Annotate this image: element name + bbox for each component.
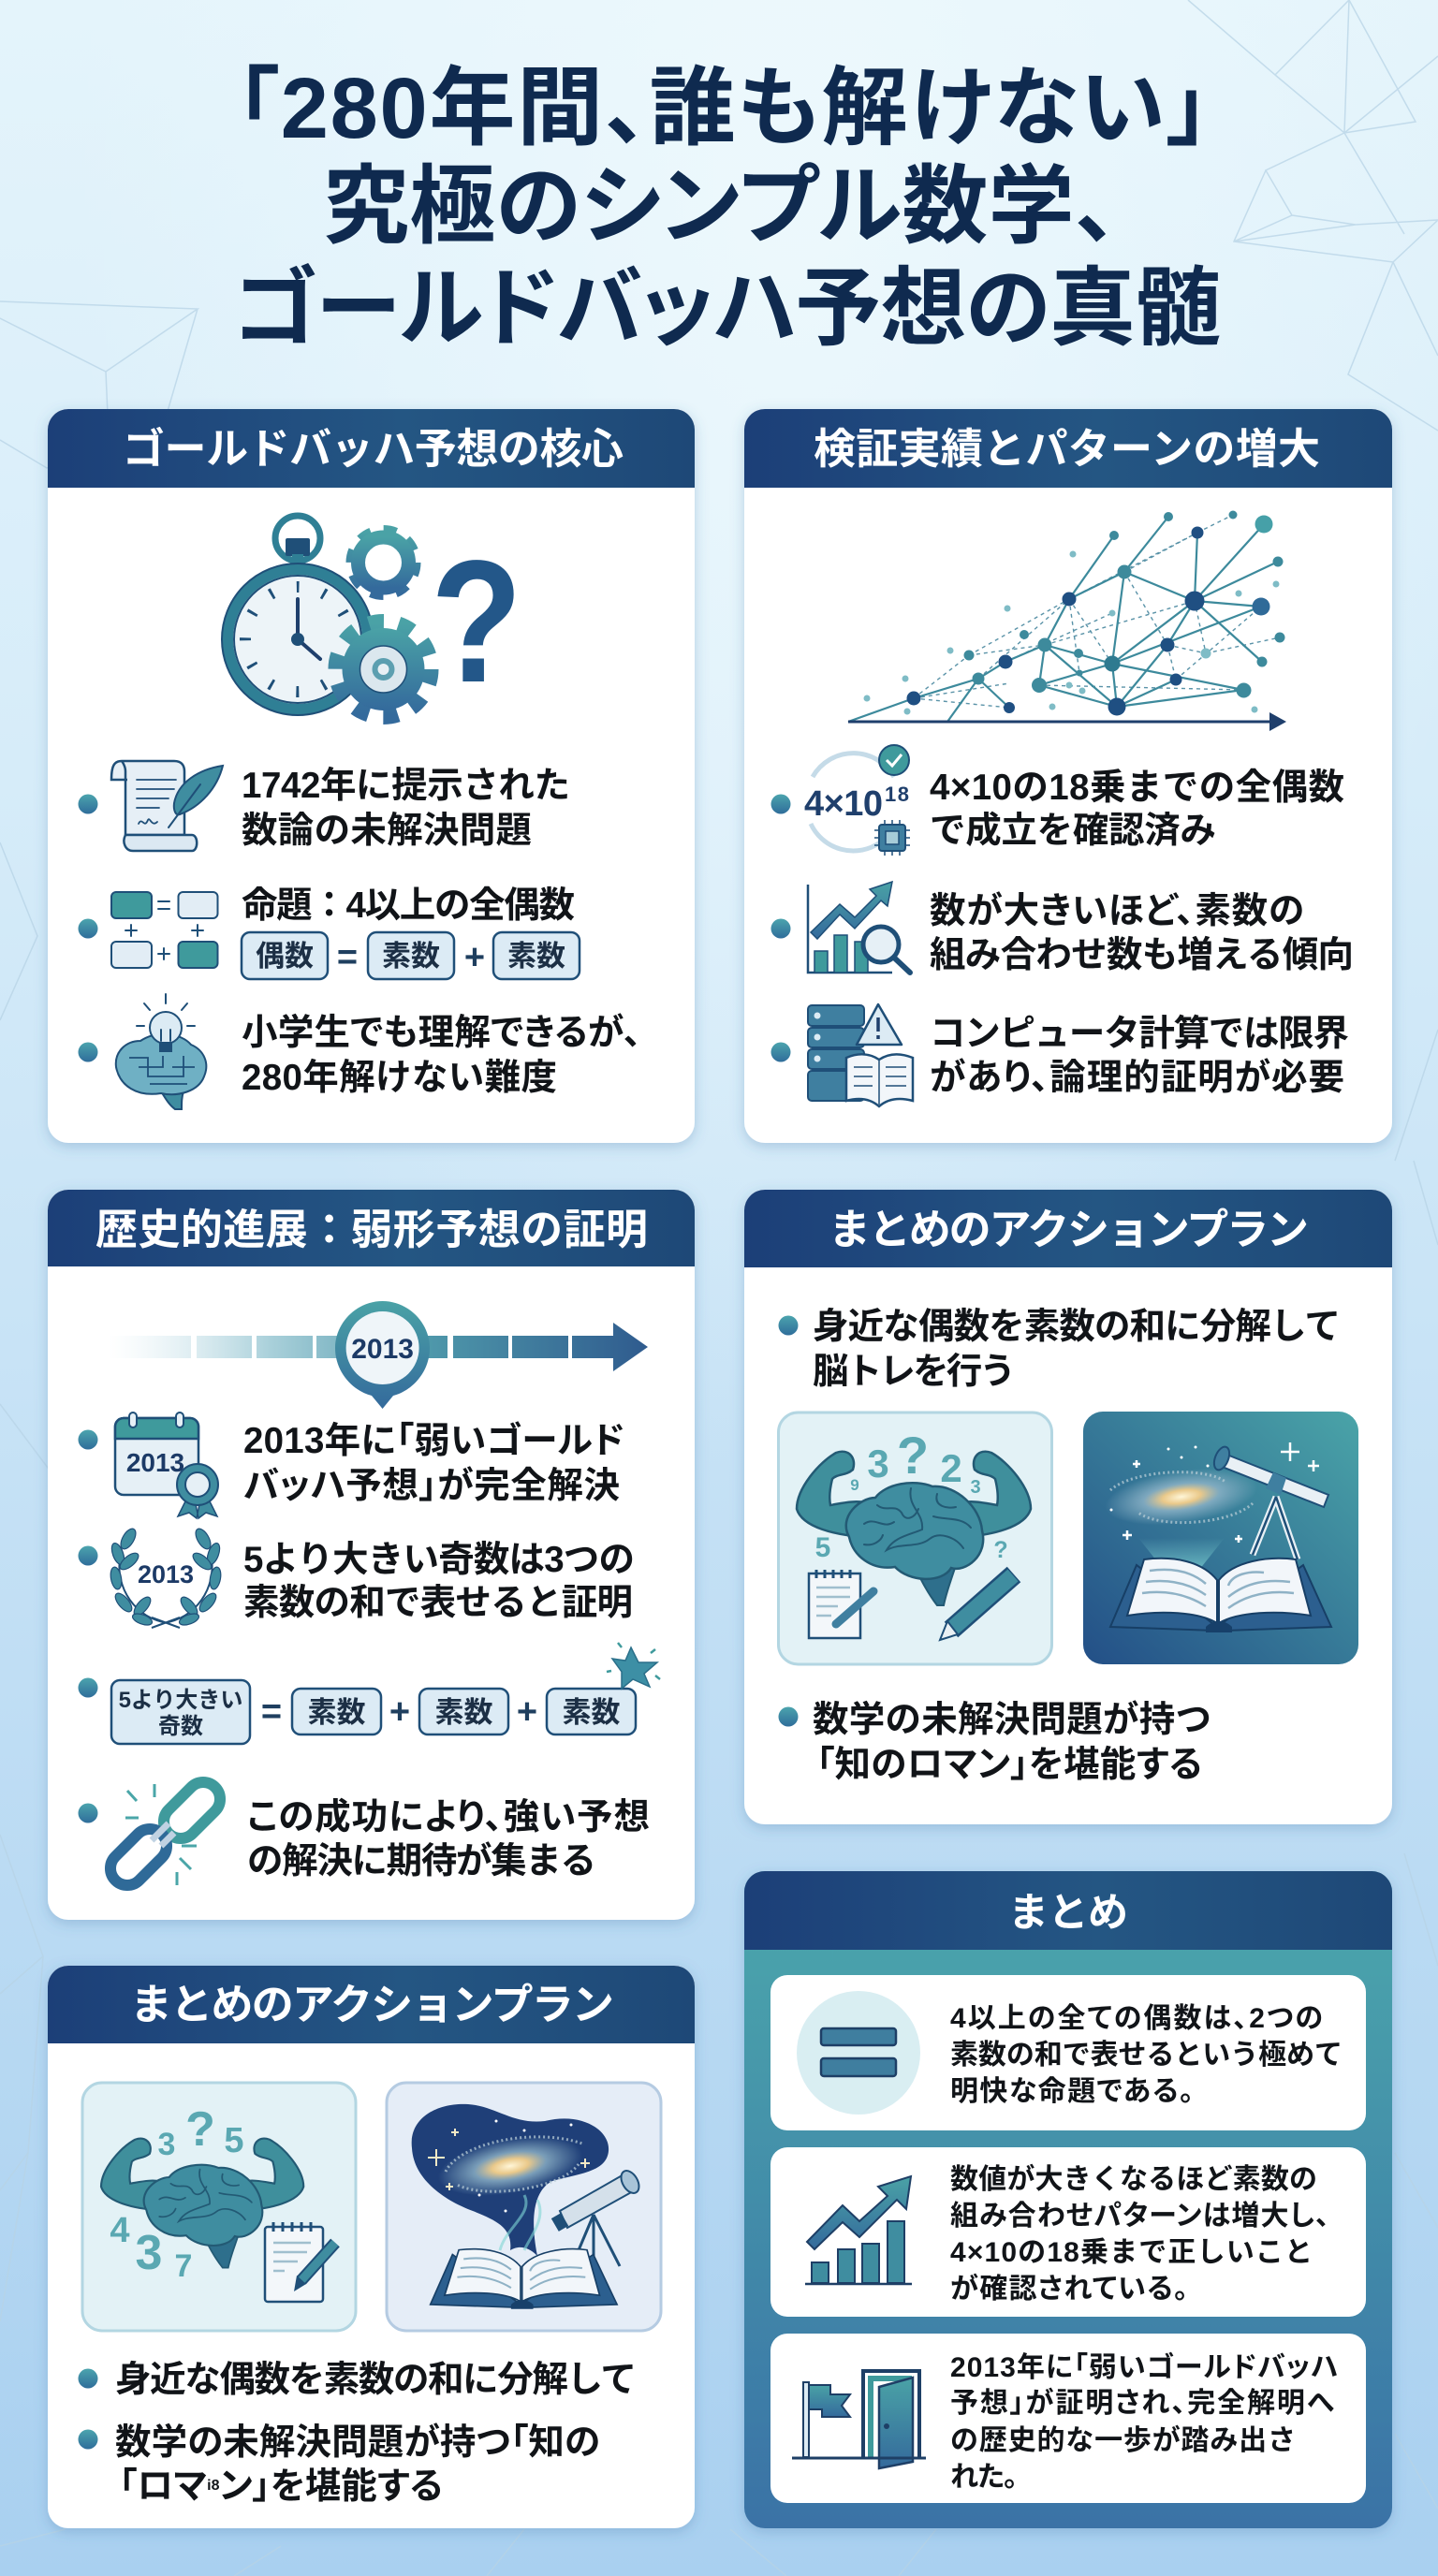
summary card: growth of patterns <box>770 2147 1366 2317</box>
bullet item: proposition: 命題：4以上の全偶数 <box>242 886 575 926</box>
bullet item: decompose even numbers: 身近な偶数を素数の和に分解して <box>115 2360 637 2400</box>
bullet item: computation limit: があり、論理的証明が必要 <box>930 1058 1344 1098</box>
summary card: growth of patterns: 数値が大きくなるほど素数の <box>950 2163 1317 2195</box>
panel heading: まとめのアクションプラン <box>130 1981 614 2028</box>
bullet item: three-prime equation <box>79 1643 660 1744</box>
bullet item: history: 数論の未解決問題 <box>242 811 532 851</box>
bullet item: growth tendency: 組み合わせ数も増える傾向 <box>930 935 1354 975</box>
bullet item: verified range: で成立を確認済み <box>930 811 1216 851</box>
card: muscular brain illustration: 3 <box>136 2226 162 2280</box>
card: muscular brain illustration: 4 <box>110 2211 130 2250</box>
summary card: growth of patterns: が確認されている。 <box>950 2273 1188 2305</box>
bullet item: three-prime equation: 5より大きい <box>119 1688 242 1713</box>
summary card: growth of patterns: 組み合わせパターンは増大し、 <box>950 2201 1329 2232</box>
bullet item: verified range <box>771 745 1344 856</box>
title: 究極のシンプル数学、 <box>323 159 1118 255</box>
bullet item: computation limit <box>771 1004 1349 1106</box>
icon: equals sign <box>797 1991 920 2115</box>
card: muscular brain illustration: 3 <box>158 2127 175 2162</box>
icon: stopwatch, gears and question mark: ? <box>431 524 522 719</box>
icon: box equation <box>111 892 217 968</box>
equation: even = prime + prime: 素数 <box>382 940 440 973</box>
card: muscular brain illustration <box>779 1412 1052 1664</box>
bullet item: three-prime equation: = <box>261 1692 282 1732</box>
summary card: the proposition: 素数の和で表せるという極めて <box>950 2040 1343 2071</box>
bullet item: growth tendency: 数が大きいほど、素数の <box>930 891 1304 931</box>
bullet item: three-prime equation: 奇数 <box>158 1714 203 1739</box>
icon: laurel wreath 2013: 2013 <box>138 1560 194 1588</box>
bullet item: difficulty: 小学生でも理解できるが、 <box>242 1013 641 1053</box>
bullet item: weak conjecture statement: 5より大きい奇数は3つの <box>243 1540 635 1580</box>
bullet item: weak conjecture statement <box>79 1527 635 1628</box>
bullet item: proposition <box>79 886 580 979</box>
icon: broken chain <box>104 1776 227 1892</box>
bullet item: romance of knowledge: 「ロマ <box>119 2466 207 2507</box>
panel heading <box>48 409 695 488</box>
panel heading <box>48 1966 695 2043</box>
card: muscular brain illustration: ? <box>993 1537 1008 1563</box>
panel heading: 歴史的進展：弱形予想の証明 <box>95 1206 648 1253</box>
bullet item: romance of mathematics: 数学の未解決問題が持つ <box>813 1700 1211 1740</box>
panel: verification record and growth of patterns <box>744 409 1392 1143</box>
card: muscular brain illustration: 9 <box>850 1476 859 1494</box>
icon: server, warning and book <box>808 1004 913 1106</box>
bullet item: three-prime equation: 素数 <box>307 1696 365 1729</box>
card: galaxy, telescope and book illustration <box>1083 1412 1358 1664</box>
panel heading: 検証実績とパターンの増大 <box>814 425 1320 473</box>
icon: rising chart with magnifier <box>808 882 910 973</box>
bullet item: history <box>79 761 570 851</box>
card: muscular brain illustration: 5 <box>224 2121 244 2160</box>
icon: calendar with rosette: 2013 <box>126 1448 184 1477</box>
bullet item: three-prime equation: + <box>517 1692 537 1732</box>
card: galaxy, telescope and book illustration <box>387 2083 661 2331</box>
panel: historical progress <box>48 1190 695 1920</box>
icon: rising bar chart <box>805 2176 912 2284</box>
panel: core of the conjecture <box>48 409 695 1143</box>
summary card: historic step: の歴史的な一歩が踏み出さ <box>950 2424 1296 2456</box>
equation: even = prime + prime <box>242 932 580 979</box>
panel heading: まとめのアクションプラン <box>829 1206 1309 1253</box>
card: muscular brain illustration: 3 <box>970 1477 981 1498</box>
card: muscular brain illustration: ? <box>897 1426 929 1485</box>
bullet item: romance of knowledge: i8 <box>207 2478 220 2494</box>
bullet item: solved in 2013: 2013年に「弱いゴールド <box>243 1421 624 1461</box>
icon: star <box>607 1643 660 1689</box>
card: muscular brain illustration <box>82 2083 356 2331</box>
summary card: historic step: 2013年に「弱いゴールドバッハ <box>950 2351 1338 2383</box>
icon: 4×10^18 with check and chip: 18 <box>885 783 909 806</box>
summary card: historic step: 予想」が証明され、完全解明へ <box>950 2387 1334 2419</box>
title <box>232 61 1221 357</box>
panel: action plan (right) <box>744 1190 1392 1824</box>
panel heading <box>744 1871 1392 1950</box>
summary card: the proposition: 明快な命題である。 <box>950 2076 1194 2107</box>
bullet item: expectations for strong conjecture: この成功により、強い予想 <box>247 1797 650 1837</box>
bullet item: three-prime equation: + <box>389 1692 410 1732</box>
bullet item: romance of knowledge: 数学の未解決問題が持つ「知の <box>115 2422 600 2463</box>
bullet item: solved in 2013: バッハ予想」が完全解決 <box>243 1466 620 1506</box>
equation: even = prime + prime: 素数 <box>507 940 565 973</box>
bullet item: solved in 2013 <box>79 1412 624 1518</box>
summary card: the proposition <box>770 1975 1366 2130</box>
title: 「280年間、誰も解けない」 <box>236 61 1210 156</box>
panel heading <box>744 409 1392 488</box>
bullet item: brain training: 脳トレを行う <box>813 1352 1016 1392</box>
summary card: growth of patterns: 4×10の18乗まで正しいこと <box>950 2237 1313 2268</box>
icon: stopwatch, gears and question mark <box>222 516 522 719</box>
chart: prime network growing along an axis <box>848 511 1286 731</box>
card: muscular brain illustration: 3 <box>867 1442 889 1486</box>
bullet item: romance of mathematics: 「知のロマン」を堪能する <box>816 1745 1202 1785</box>
icon: scroll and quill <box>111 761 223 851</box>
timeline arrow with 2013 pin <box>109 1301 648 1409</box>
equation: even = prime + prime: = <box>337 938 358 977</box>
card: muscular brain illustration: 2 <box>940 1446 962 1490</box>
bullet item: three-prime equation: 素数 <box>562 1696 620 1729</box>
bullet item: romance of mathematics <box>779 1700 1211 1785</box>
bullet item: brain training <box>779 1307 1341 1392</box>
icon: brain with light bulb <box>116 994 206 1109</box>
bullet item: history: 1742年に提示された <box>242 766 570 806</box>
bullet item: expectations for strong conjecture: の解決に期待が集まる <box>247 1841 596 1881</box>
timeline arrow with 2013 pin: 2013 <box>351 1334 414 1365</box>
icon: calendar with rosette <box>115 1412 218 1518</box>
equation: even = prime + prime: + <box>464 938 485 977</box>
bullet item: romance of knowledge <box>79 2422 600 2507</box>
icon: 4×10^18 with check and chip <box>804 745 910 856</box>
bullet item: three-prime equation: 素数 <box>434 1696 492 1729</box>
bullet item: brain training: 身近な偶数を素数の和に分解して <box>813 1307 1341 1347</box>
bullet item: difficulty: 280年解けない難度 <box>242 1058 557 1098</box>
panel heading <box>744 1190 1392 1267</box>
panel heading <box>48 1190 695 1266</box>
bullet item: difficulty <box>79 994 641 1109</box>
icon: laurel wreath 2013 <box>109 1527 223 1628</box>
panel: action plan (left) <box>48 1966 695 2528</box>
panel heading: ゴールドバッハ予想の核心 <box>123 425 624 473</box>
summary card: historic step <box>770 2334 1366 2503</box>
icon: flag and open door <box>792 2371 926 2468</box>
panel heading: まとめ <box>1008 1891 1128 1936</box>
summary card: historic step: れた。 <box>950 2462 1018 2493</box>
title: ゴールドバッハ予想の真髄 <box>232 261 1221 357</box>
card: muscular brain illustration: ? <box>185 2102 215 2157</box>
bullet item: verified range: 4×10の18乗までの全偶数 <box>930 768 1344 808</box>
bullet item: weak conjecture statement: 素数の和で表せると証明 <box>243 1583 633 1623</box>
bullet item: growth tendency <box>771 882 1354 975</box>
bullet item: expectations for strong conjecture <box>79 1776 650 1892</box>
bullet item: computation limit: コンピュータ計算では限界 <box>930 1014 1349 1054</box>
panel: summary <box>744 1871 1392 2528</box>
equation: even = prime + prime: 偶数 <box>256 940 314 973</box>
summary card: the proposition: 4以上の全ての偶数は、2つの <box>950 2003 1323 2034</box>
card: muscular brain illustration: 5 <box>815 1532 830 1563</box>
icon: 4×10^18 with check and chip: 4×10 <box>804 784 883 824</box>
bullet item: romance of knowledge: ン」を堪能する <box>219 2466 443 2507</box>
card: muscular brain illustration: 7 <box>175 2248 192 2284</box>
